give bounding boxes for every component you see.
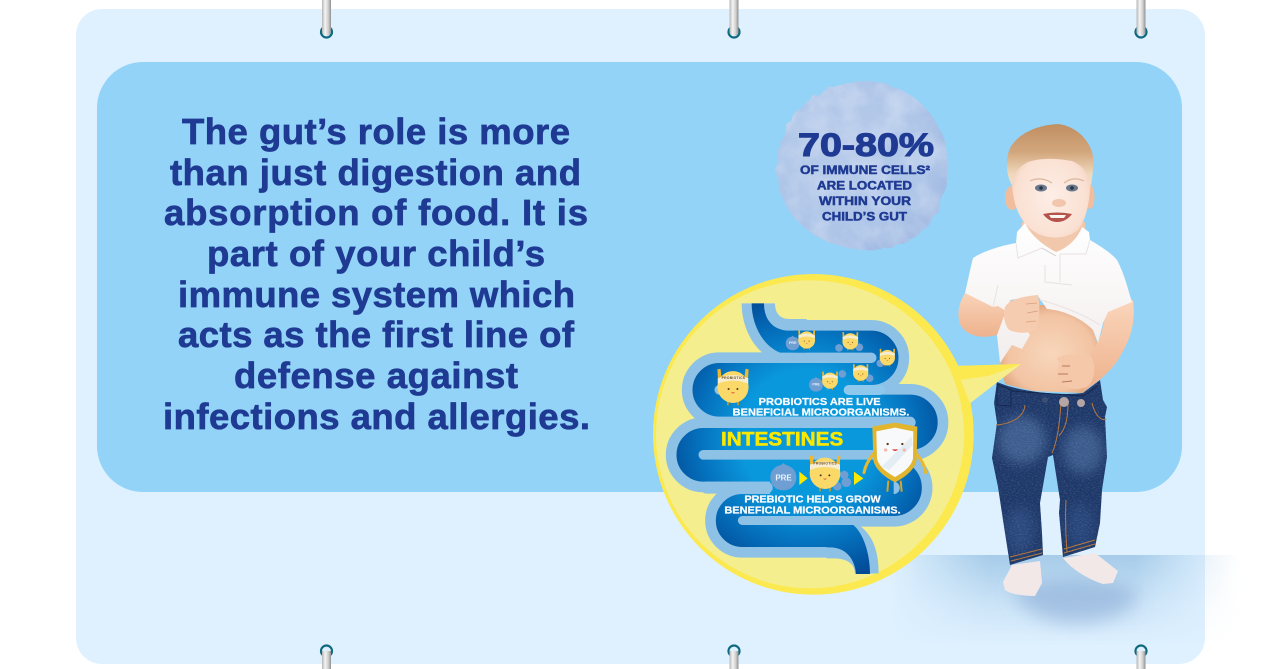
shirt folds and collar <box>993 240 1100 325</box>
heading: gut immune statement: The gut’s role is more <box>182 111 570 152</box>
callout: 70-80% watercolor badge <box>777 81 948 250</box>
probiotic and prebiotic characters: upper bowel <box>717 330 895 405</box>
badge caption: OF IMMUNE CELLS² <box>800 163 930 177</box>
neck <box>1022 222 1086 258</box>
heading: gut immune statement: absorption of food. It is <box>164 192 588 233</box>
badge caption: CHILD’S GUT <box>822 210 908 224</box>
tummy <box>1000 305 1098 393</box>
badge caption: ARE LOCATED <box>817 178 912 192</box>
heading: gut immune statement: part of your child’s <box>207 233 545 274</box>
heading: gut immune statement: than just digestion and <box>170 152 581 193</box>
heading: gut immune statement: defense against <box>234 355 518 396</box>
photo: toddler lifting shirt <box>958 124 1134 596</box>
jeans <box>992 380 1107 565</box>
intestine folds <box>707 390 880 488</box>
heading: gut immune statement: acts as the first line of <box>178 314 575 355</box>
diagram caption: prebiotic: PREBIOTIC HELPS GROW <box>744 495 881 506</box>
jeans stitching and buttons <box>996 384 1106 561</box>
flow: prebiotic grows probiotic into shield: PROBIOTICS <box>813 461 837 465</box>
ears <box>1005 185 1094 210</box>
face <box>1012 146 1091 238</box>
left hand <box>1004 295 1039 333</box>
mouth <box>1043 212 1072 222</box>
shirt <box>965 223 1132 363</box>
hair <box>1007 124 1093 186</box>
nose <box>1052 199 1066 207</box>
hanging pins <box>321 0 1146 669</box>
icon: watercolor circle <box>777 81 948 250</box>
socks <box>1003 553 1118 596</box>
heading: gut immune statement: immune system which <box>178 274 575 315</box>
label: INTESTINES: INTESTINES <box>721 430 843 451</box>
diagram caption: probiotics: BENEFICIAL MICROORGANISMS. <box>733 408 909 419</box>
eyebrows and eyes <box>1030 179 1084 192</box>
flow: prebiotic grows probiotic into shield <box>770 455 863 491</box>
intestine tube outer wall <box>687 303 927 574</box>
right arm <box>1075 300 1134 390</box>
probiotic and prebiotic characters: upper bowel: PRE <box>789 341 797 345</box>
flow: prebiotic grows probiotic into shield: PRE <box>775 474 792 483</box>
right hand <box>1057 354 1094 389</box>
shadow under child <box>1012 580 1136 623</box>
heading: gut immune statement <box>163 111 590 437</box>
diagram caption: probiotics <box>733 397 909 419</box>
left arm <box>958 290 1022 337</box>
diagram caption: prebiotic: BENEFICIAL MICROORGANISMS. <box>724 505 901 516</box>
icon: smiling shield character <box>864 423 926 492</box>
statistic: 70-80%: 70-80% <box>798 127 934 163</box>
probiotic and prebiotic characters: upper bowel: PROBIOTICS <box>722 376 746 380</box>
badge caption <box>800 163 930 224</box>
diagram caption: prebiotic <box>724 495 901 516</box>
diagram caption: probiotics: PROBIOTICS ARE LIVE <box>759 397 881 408</box>
heading: gut immune statement: infections and allergies. <box>163 396 590 437</box>
floor shadow band <box>906 555 1226 630</box>
speech bubble: intestines diagram <box>653 274 1021 595</box>
panel: inner blue card <box>97 62 1182 492</box>
bubble body <box>653 274 1021 595</box>
badge caption: WITHIN YOUR <box>819 194 911 208</box>
intestine tube lumen <box>687 303 927 574</box>
probiotic and prebiotic characters: upper bowel: PRE <box>812 383 820 387</box>
